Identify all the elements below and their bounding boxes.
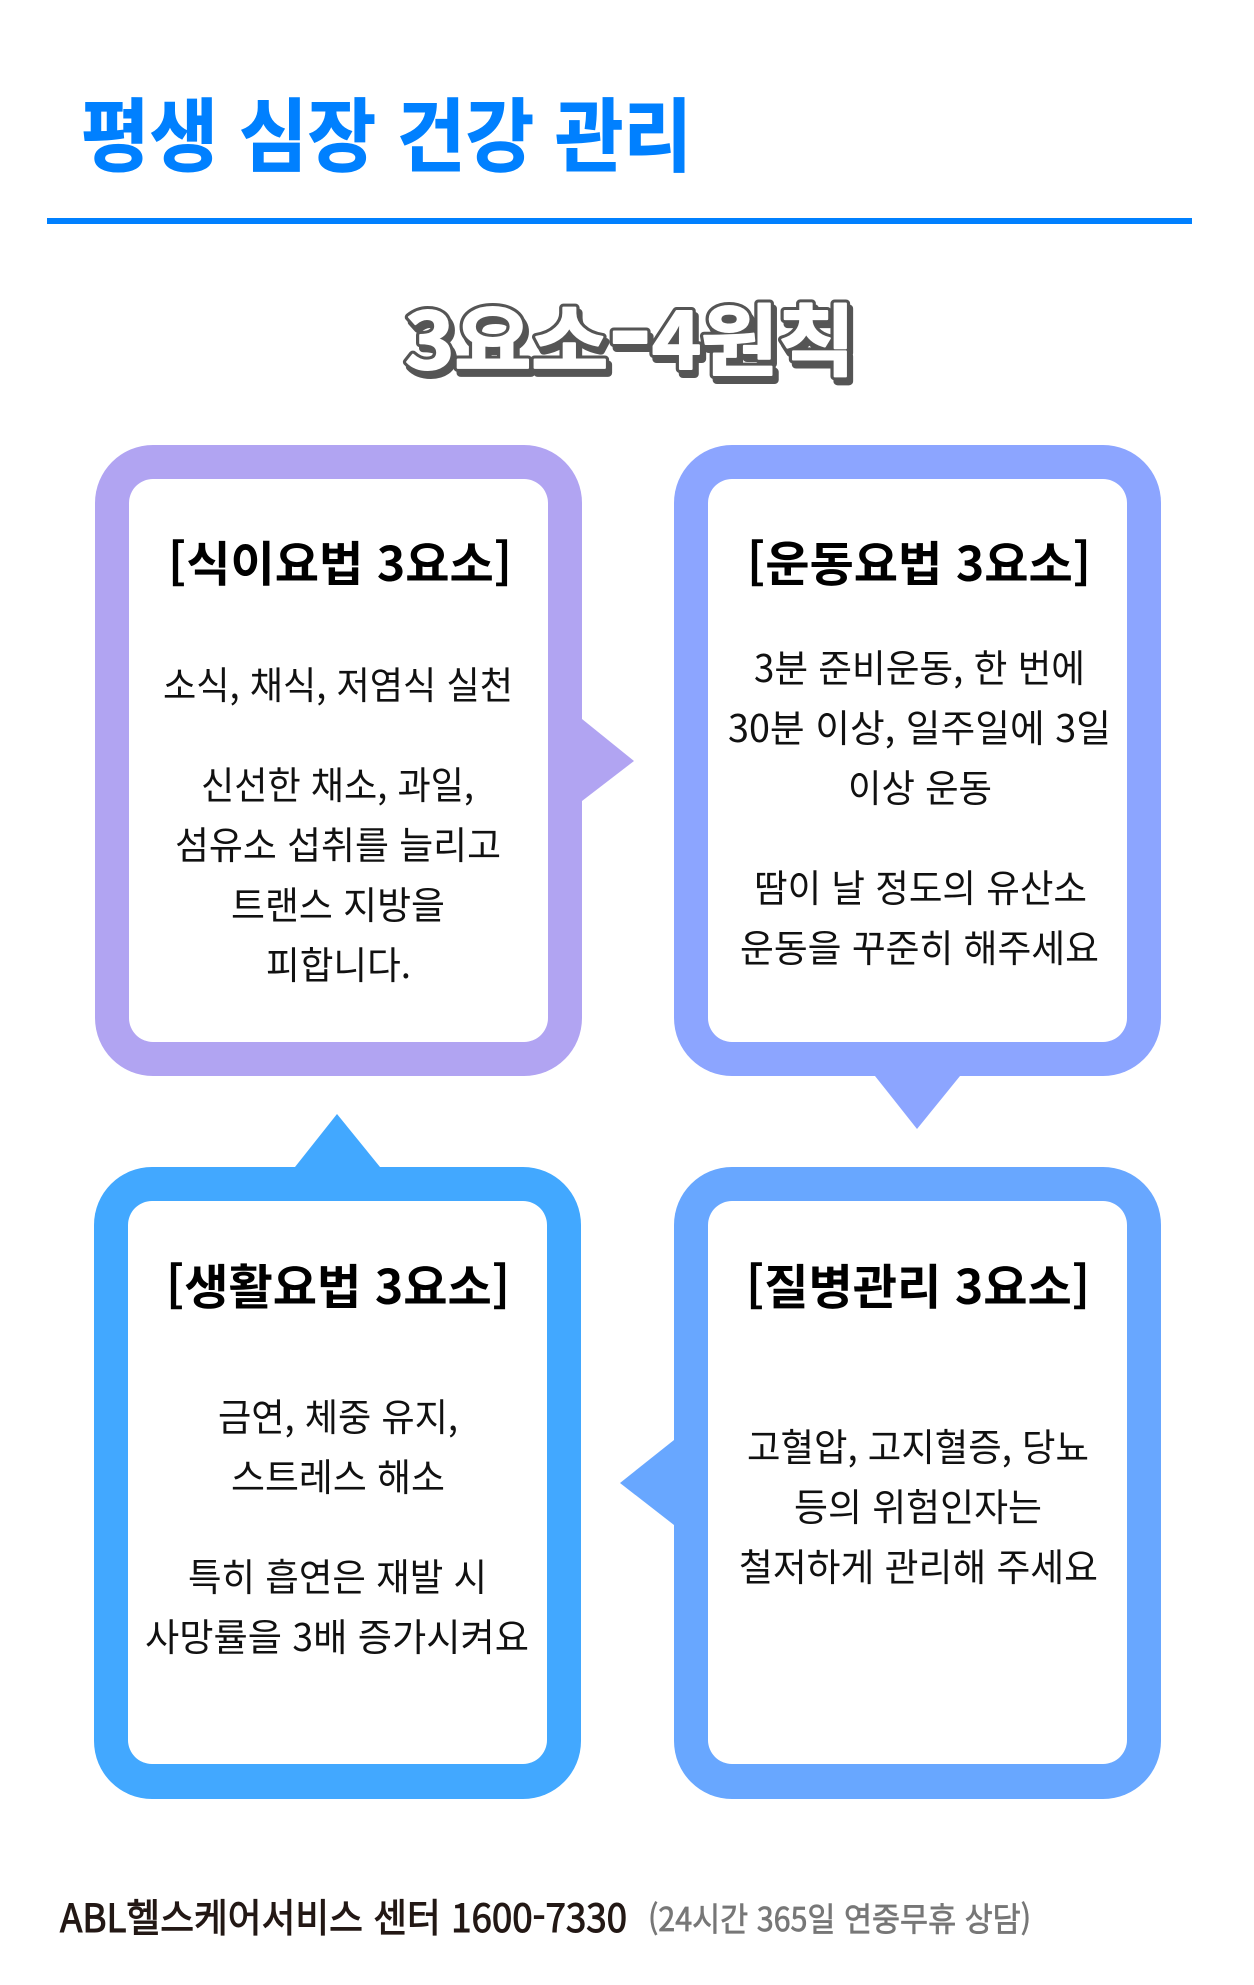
subtitle: 3 elements 4 principles: 4원칙: [652, 280, 855, 392]
disease heading: [질병관리 3요소]: [746, 1248, 1090, 1318]
disease text: 고혈압, 고지혈증, 당뇨: [747, 1417, 1089, 1472]
disease text: 철저하게 관리해 주세요: [739, 1537, 1098, 1592]
diet text: 신선한 채소, 과일,: [201, 755, 474, 810]
lifestyle text: 금연, 체중 유지,: [218, 1387, 458, 1442]
lifestyle text: [145, 1387, 529, 1662]
footer: [60, 1888, 1031, 1944]
title: 평생 심장 건강 관리: [81, 73, 692, 189]
subtitle: 3 elements 4 principles: -: [608, 251, 652, 411]
subtitle: 3 elements 4 principles: -: [608, 251, 652, 411]
speech bubble frame with left arrow: [620, 1167, 1161, 1799]
lifestyle text: 사망률을 3배 증가시켜요: [145, 1607, 529, 1662]
diet heading: [식이요법 3요소]: [168, 525, 512, 595]
speech bubble frame with right arrow: [95, 445, 634, 1076]
diet text: 섬유소 섭취를 늘리고: [175, 815, 501, 870]
exercise heading: [운동요법 3요소]: [747, 525, 1091, 595]
speech bubble frame with down arrow: [674, 445, 1161, 1129]
lifestyle text: 특히 흡연은 재발 시: [188, 1547, 487, 1602]
panel: diet: [95, 445, 634, 1076]
lifestyle text: 스트레스 해소: [231, 1447, 445, 1502]
diet text: 트랜스 지방을: [231, 875, 445, 930]
exercise text: 3분 준비운동, 한 번에: [754, 638, 1085, 693]
panel: disease: [620, 1167, 1161, 1799]
diet text: [163, 655, 513, 990]
subtitle: 3 elements 4 principles: 3요소: [405, 280, 595, 392]
subtitle: 3 elements 4 principles: 3요소: [405, 280, 595, 392]
service center phone: ABL헬스케어서비스 센터 1600-7330: [60, 1888, 627, 1944]
panel: lifestyle: [94, 1114, 581, 1799]
diet text: 소식, 채식, 저염식 실천: [163, 655, 513, 710]
exercise text: 운동을 꾸준히 해주세요: [740, 918, 1099, 973]
exercise text: [728, 638, 1111, 973]
lifestyle heading: [생활요법 3요소]: [166, 1248, 510, 1318]
subtitle: 3 elements 4 principles: 4원칙: [652, 280, 855, 392]
panel: exercise: [674, 445, 1161, 1129]
exercise text: 이상 운동: [848, 758, 992, 813]
subtitle: 3 elements 4 principles: [405, 251, 858, 416]
subtitle: 3 elements 4 principles: 3요소: [408, 285, 598, 397]
exercise text: 30분 이상, 일주일에 3일: [728, 698, 1111, 753]
disease text: 등의 위험인자는: [794, 1477, 1042, 1532]
speech bubble frame with up arrow: [94, 1114, 581, 1799]
disease text: [739, 1417, 1098, 1592]
consultation hours: (24시간 365일 연중무휴 상담): [648, 1893, 1031, 1941]
diet text: 피합니다.: [266, 935, 411, 990]
exercise text: 땀이 날 정도의 유산소: [754, 858, 1087, 913]
subtitle: 3 elements 4 principles: 4원칙: [655, 285, 858, 397]
subtitle: 3 elements 4 principles: -: [611, 256, 655, 416]
